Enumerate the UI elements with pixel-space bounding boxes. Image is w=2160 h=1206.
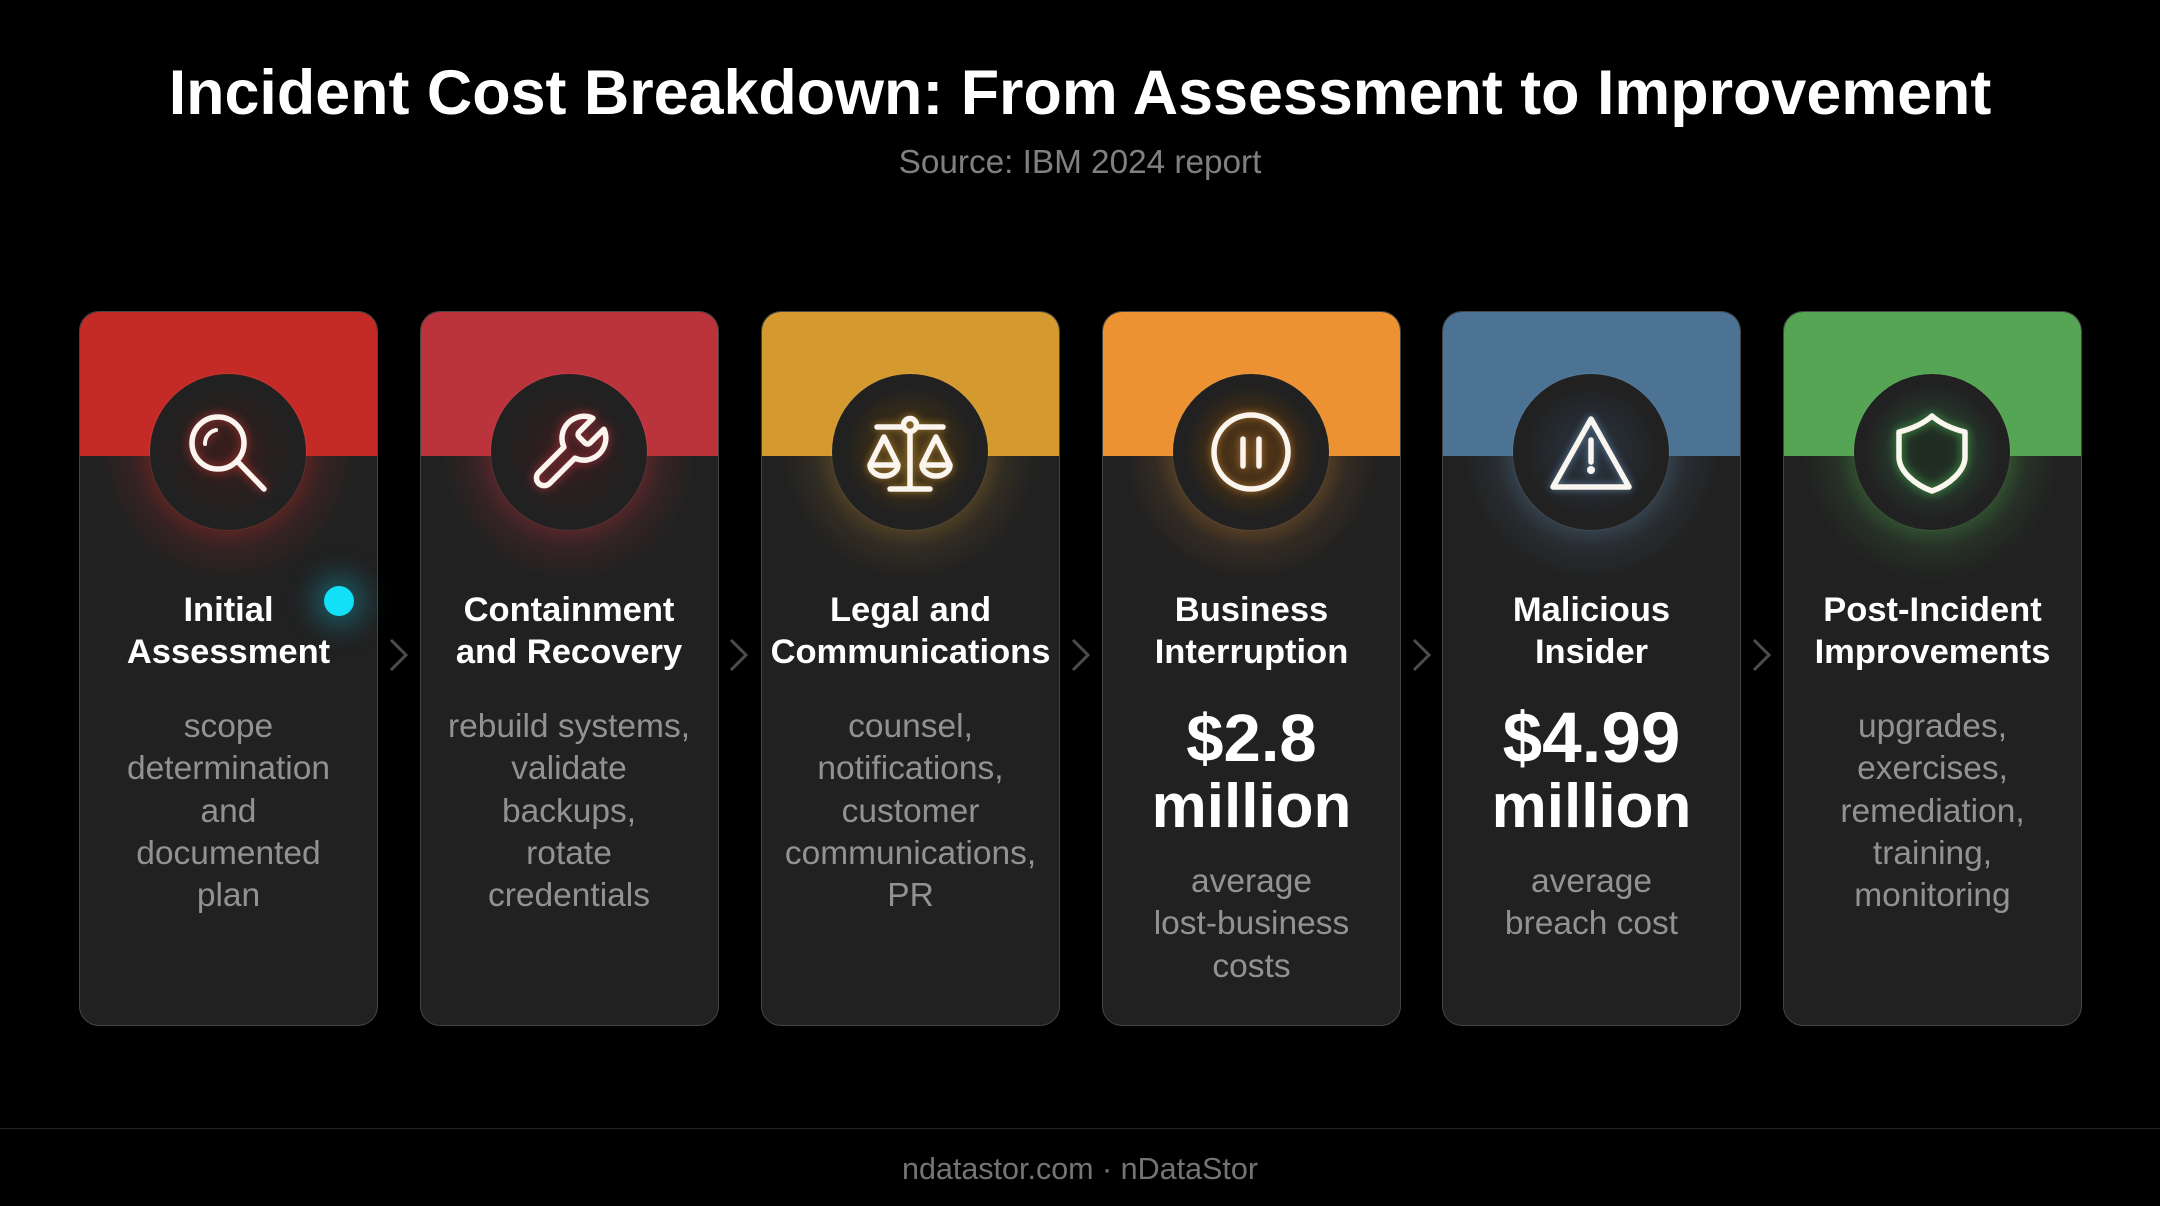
description: costs bbox=[1212, 948, 1291, 985]
colour header bbox=[1103, 312, 1400, 456]
description: scope bbox=[184, 708, 273, 745]
colour header bbox=[1784, 312, 2081, 456]
colour header bbox=[420, 312, 718, 456]
heading: Initial bbox=[183, 591, 274, 629]
arrow bbox=[1413, 639, 1431, 671]
description bbox=[785, 708, 1036, 914]
panel: Malicious Insider bbox=[1442, 311, 1741, 1026]
description: documented bbox=[136, 835, 321, 872]
description: plan bbox=[197, 877, 260, 914]
big number: $2.8 bbox=[1186, 701, 1317, 776]
description bbox=[1154, 863, 1349, 985]
description: rebuild systems, bbox=[448, 708, 690, 745]
cyan indicator dot bbox=[324, 586, 354, 616]
description: rotate bbox=[526, 835, 612, 872]
description: communications, bbox=[785, 835, 1036, 872]
glow under icon bbox=[1784, 456, 2081, 646]
heading bbox=[771, 591, 1050, 670]
heading bbox=[1155, 591, 1348, 670]
description: determination bbox=[127, 750, 330, 787]
description: validate bbox=[511, 750, 627, 787]
footer text: ndatastor.com · nDataStor bbox=[902, 1152, 1258, 1186]
description: breach cost bbox=[1505, 905, 1678, 942]
heading: and Recovery bbox=[456, 632, 682, 670]
heading: Malicious bbox=[1513, 591, 1670, 629]
footer rule bbox=[0, 1128, 2160, 1129]
description: average bbox=[1191, 863, 1312, 900]
arrow bbox=[1753, 639, 1771, 671]
panel: Post-Incident Improvements bbox=[1783, 311, 2082, 1026]
description: lost-business bbox=[1154, 905, 1349, 942]
heading: Interruption bbox=[1155, 632, 1348, 670]
icon disc bbox=[1513, 374, 1669, 530]
description: credentials bbox=[488, 877, 650, 914]
big number: $4.99 bbox=[1503, 699, 1680, 778]
description: upgrades, bbox=[1858, 708, 2007, 745]
panel: Business Interruption bbox=[1102, 311, 1401, 1026]
icon: shield bbox=[1889, 408, 1975, 500]
description: monitoring bbox=[1854, 877, 2011, 914]
colour header bbox=[1443, 312, 1740, 456]
heading: Assessment bbox=[127, 632, 330, 670]
description bbox=[1505, 863, 1678, 942]
arrow bbox=[730, 639, 748, 671]
icon disc bbox=[832, 374, 988, 530]
panel: Containment and Recovery bbox=[420, 311, 718, 1026]
description: and bbox=[201, 793, 256, 830]
big number bbox=[1492, 699, 1691, 841]
description bbox=[1840, 708, 2025, 914]
big number: million bbox=[1152, 772, 1351, 841]
glow under icon bbox=[1443, 456, 1740, 646]
glow under icon bbox=[420, 456, 718, 646]
big number bbox=[1152, 701, 1351, 841]
description: average bbox=[1531, 863, 1652, 900]
heading bbox=[1815, 591, 2050, 670]
heading: Business bbox=[1175, 591, 1328, 629]
description: exercises, bbox=[1857, 750, 2008, 787]
heading: Containment bbox=[464, 591, 674, 629]
description bbox=[127, 708, 330, 914]
icon: warning triangle bbox=[1546, 412, 1636, 495]
heading: Insider bbox=[1535, 632, 1648, 670]
icon disc bbox=[490, 374, 646, 530]
description: notifications, bbox=[817, 750, 1004, 787]
subtitle: source: Source: IBM 2024 report bbox=[899, 144, 1261, 181]
heading bbox=[127, 591, 330, 670]
heading bbox=[1513, 591, 1670, 670]
big number: million bbox=[1492, 772, 1691, 841]
icon: scales bbox=[862, 411, 957, 497]
glow under icon bbox=[80, 456, 377, 646]
icon disc bbox=[1854, 374, 2010, 530]
heading: Legal and bbox=[830, 591, 991, 629]
heading: Communications bbox=[771, 632, 1050, 670]
description: PR bbox=[887, 877, 934, 914]
description: counsel, bbox=[848, 708, 973, 745]
description: remediation, bbox=[1840, 793, 2025, 830]
title: Incident Cost Breakdown: From Assessment to Improvement bbox=[169, 58, 1991, 128]
icon: wrench bbox=[528, 406, 616, 495]
heading: Post-Incident bbox=[1823, 591, 2042, 629]
heading bbox=[456, 591, 682, 670]
arrow bbox=[1072, 639, 1090, 671]
panel: Initial Assessment bbox=[79, 311, 378, 1026]
glow under icon bbox=[1103, 456, 1400, 646]
colour header bbox=[80, 312, 377, 456]
description bbox=[448, 708, 690, 914]
icon: magnifying glass bbox=[182, 408, 272, 496]
description: backups, bbox=[502, 793, 636, 830]
arrow bbox=[390, 639, 408, 671]
heading: Improvements bbox=[1815, 632, 2050, 670]
icon disc bbox=[150, 374, 306, 530]
colour header bbox=[762, 312, 1059, 456]
icon: pause bbox=[1206, 407, 1296, 497]
description: training, bbox=[1873, 835, 1992, 872]
icon disc bbox=[1173, 374, 1329, 530]
glow under icon bbox=[762, 456, 1059, 646]
description: customer bbox=[842, 793, 979, 830]
panel: Legal and Communications bbox=[761, 311, 1060, 1026]
